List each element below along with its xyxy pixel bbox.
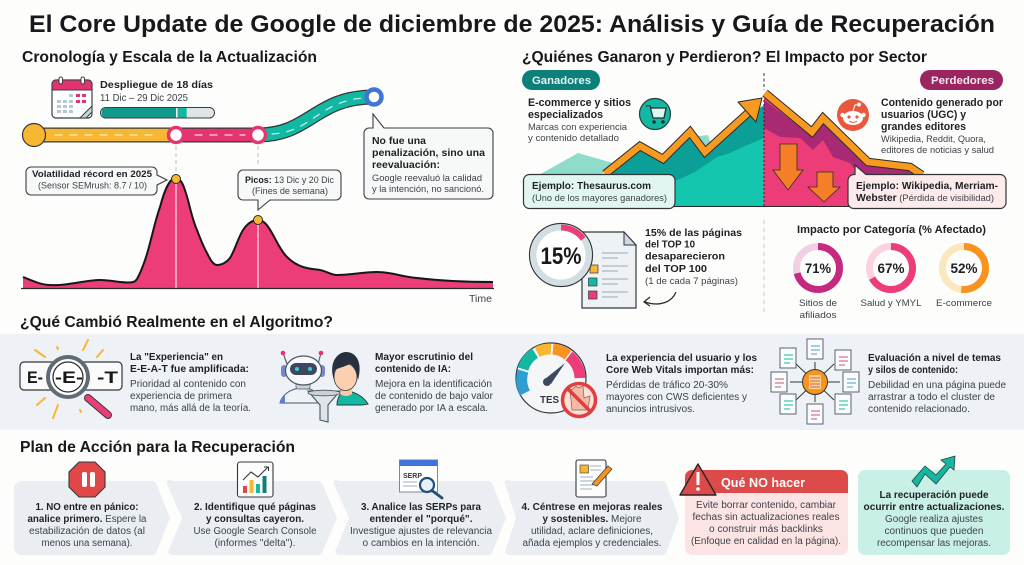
stat ring: 15%	[530, 224, 592, 286]
step 1 chevron	[14, 481, 170, 555]
donut: 67%	[870, 246, 912, 290]
icon: down arrow small	[808, 172, 840, 202]
text: core web vitals: Pérdidas de tráfico 20-30%	[606, 380, 728, 391]
box: qué no hacer: Qué NO hacer	[721, 475, 805, 490]
step 3 chevron: 3. Analice las SERPs para	[361, 502, 481, 513]
box: qué no hacer	[680, 464, 848, 555]
step 3 chevron	[334, 480, 506, 555]
callout: ejemplo perdedor: Webster (Pérdida de visibilidad)	[856, 192, 994, 204]
icon: gauge with prohibition	[516, 343, 596, 416]
step 2 chevron: Use Google Search Console	[194, 526, 317, 537]
text: evaluación temas: Evaluación a nivel de temas	[868, 353, 1001, 364]
title: El Core Update de Google de diciembre de 2025: Análisis y Guía de Recuperación	[29, 11, 995, 38]
text: evaluación temas	[868, 353, 1006, 415]
step 4 chevron: añada ejemplos y credenciales.	[522, 538, 662, 549]
step 4 chevron: utilidad, aclare definiciones,	[531, 526, 653, 537]
heading: impacto por sector: ¿Quiénes Ganaron y Perdieron? El Impacto por Sector	[522, 49, 927, 66]
icon: upward arrow	[912, 456, 955, 487]
text: experiencia: E-E-A-T fue amplificada:	[130, 364, 249, 375]
callout: picos	[238, 170, 341, 210]
donut: 71%	[796, 246, 840, 290]
step 2 chevron: y consultas cayeron.	[206, 514, 304, 525]
box: qué no hacer: fechas sin actualizaciones reales	[692, 512, 840, 523]
text: despliegue	[100, 79, 213, 104]
icon: robot, person and funnel	[280, 351, 368, 422]
pill: perdedores: Perdedores	[931, 75, 994, 87]
text: 15% de páginas: del TOP 100	[645, 263, 707, 275]
stat ring: 15%: 15%	[540, 243, 582, 270]
text: contenido de IA	[375, 352, 494, 414]
icon: gauge with prohibition: TES	[540, 395, 559, 406]
icon: SERP magnifier	[400, 460, 442, 498]
step 1 chevron: 1. NO entre en pánico:	[36, 502, 138, 513]
icon: SERP magnifier: SERP	[403, 471, 422, 480]
text: contenido de IA: Mayor escrutinio del	[375, 352, 473, 363]
text: ganadores: E-commerce y sitios	[528, 97, 631, 109]
text: 15% de páginas: del TOP 10	[645, 238, 695, 250]
text: evaluación temas: Debilidad en una página puede	[868, 380, 1006, 391]
text: ganadores: Marcas con experiencia	[528, 122, 628, 133]
text: perdedores: Contenido generado por	[881, 97, 1004, 109]
callout: no fue una penalización	[364, 114, 493, 199]
callout: ejemplo ganador: (Uno de los mayores ganadores)	[532, 193, 667, 204]
timeline start node	[22, 124, 46, 146]
text: experiencia: mano, más allá de la teoría.	[130, 403, 251, 414]
callout: no fue una penalización: penalización, sino una	[372, 147, 485, 159]
timeline node: 13 Dic	[168, 128, 184, 142]
icon: E-E-A-T magnifier: -E-	[55, 368, 83, 387]
icon: shopping cart	[640, 98, 670, 130]
text: contenido de IA: generado por IA a escala.	[375, 403, 488, 414]
text: despliegue: 11 Dic – 29 Dic 2025	[100, 92, 188, 104]
text: despliegue: Despliegue de 18 días	[100, 79, 213, 91]
icon: document	[582, 232, 636, 308]
box: recuperación: continuos que pueden	[884, 526, 984, 537]
box: recuperación: La recuperación puede	[880, 490, 989, 501]
timeline node: 20 Dic	[250, 128, 266, 142]
text: experiencia: Prioridad al contenido con	[130, 379, 246, 390]
band background	[0, 334, 1024, 430]
text: contenido de IA: de contenido de bajo valor	[375, 391, 494, 402]
box: qué no hacer: Evite borrar contenido, cambiar	[696, 500, 837, 511]
text: perdedores	[881, 97, 1004, 156]
text: core web vitals: Core Web Vitals importan más:	[606, 365, 754, 376]
box: recuperación: ocurrir entre actualizaciones.	[864, 502, 1005, 513]
panel: plan de acción	[14, 439, 1010, 555]
step 1 chevron: menos una semana).	[42, 538, 132, 549]
icon: stop pause	[69, 462, 105, 497]
text: evaluación temas: arrastrar a todo el cluster de	[868, 392, 995, 403]
heading: qué cambió: ¿Qué Cambió Realmente en el Algoritmo?	[20, 314, 333, 331]
divider: categorías	[763, 220, 765, 315]
text: core web vitals: mayores con CWS deficientes y	[606, 392, 747, 403]
text: core web vitals: anuncios intrusivos.	[606, 404, 695, 415]
icon: bar chart	[238, 462, 273, 497]
icon: notepad with pencil	[576, 460, 612, 497]
callout: no fue una penalización: y la intención, no sancionó.	[372, 184, 484, 194]
axis label: time: Time	[469, 293, 492, 305]
text: 15% de páginas: desaparecieron	[645, 250, 725, 262]
step 1 chevron: analice primero. Espere la	[28, 514, 147, 525]
box: recuperación: Google realiza ajustes	[885, 514, 983, 525]
callout: picos: Picos: 13 Dic y 20 Dic	[245, 175, 334, 186]
text: experiencia: experiencia de primera	[130, 391, 232, 402]
callout: volatilidad: Volatilidad récord en 2025	[32, 169, 153, 180]
donut: 52%	[942, 246, 986, 290]
pill: perdedores	[920, 70, 1003, 90]
label: sitios de afiliados	[799, 298, 837, 321]
icon: calendar	[52, 77, 92, 118]
donut: 52%: 52%	[950, 261, 978, 276]
callout: ejemplo perdedor	[848, 165, 1006, 208]
callout: volatilidad	[26, 167, 167, 195]
pill: ganadores	[522, 70, 600, 90]
step 3 chevron: Investigue ajustes de relevancia	[350, 526, 492, 537]
icon: reddit	[837, 99, 869, 131]
icon: E-E-A-T magnifier	[20, 340, 122, 418]
icon: down arrow large	[773, 144, 803, 190]
winners chart	[537, 98, 764, 206]
box: qué no hacer: (Enfoque en calidad en la página).	[691, 536, 841, 547]
text: ganadores: y contenido detallado	[528, 133, 619, 144]
text: perdedores: usuarios (UGC) y	[881, 109, 967, 121]
label: e-commerce: E-commerce	[936, 298, 992, 309]
callout: no fue una penalización: No fue una	[372, 135, 426, 147]
label: salud y ymyl: Salud y YMYL	[860, 298, 922, 309]
callout: no fue una penalización: reevaluación:	[372, 159, 440, 171]
callout: picos: (Fines de semana)	[252, 186, 328, 197]
donut: 67%: 67%	[878, 261, 904, 276]
progress bar	[100, 108, 214, 118]
text: experiencia: La "Experiencia" en	[130, 352, 223, 363]
panel: 15% de las páginas	[530, 224, 742, 308]
heading: cronología: Cronología y Escala de la Actualización	[22, 49, 317, 66]
callout: volatilidad: (Sensor SEMrush: 8.7 / 10)	[38, 180, 147, 192]
icon: topic cluster	[771, 339, 859, 424]
step 3 chevron: entender el "porqué".	[370, 514, 473, 525]
icon: E-E-A-T magnifier: E-	[27, 368, 43, 387]
heading: plan de acción: Plan de Acción para la Recuperación	[20, 439, 295, 456]
step 4 chevron	[505, 480, 679, 555]
step 4 chevron: y sostenibles. Mejore	[542, 514, 642, 525]
callout: ejemplo ganador: Ejemplo: Thesaurus.com	[532, 180, 651, 192]
losers chart	[600, 93, 935, 206]
text: perdedores: Wikipedia, Reddit, Quora,	[881, 134, 986, 145]
step 4 chevron: 4. Céntrese en mejoras reales	[522, 502, 663, 513]
text: core web vitals	[606, 353, 757, 415]
step 2 chevron: (informes "delta").	[214, 538, 296, 549]
box: recuperación	[858, 470, 1010, 555]
timeline road	[34, 97, 374, 135]
text: perdedores: editores de noticias y salud	[881, 145, 994, 156]
box: qué no hacer: o construir más backlinks	[709, 524, 823, 535]
pill: ganadores: Ganadores	[532, 75, 591, 87]
step 3 chevron: o cambios en la intención.	[362, 538, 480, 549]
text: experiencia	[130, 352, 251, 414]
text: perdedores: grandes editores	[881, 121, 966, 133]
callout: ejemplo ganador	[524, 174, 675, 208]
icon: E-E-A-T magnifier: -T	[97, 368, 119, 387]
panel: impacto por categoría	[796, 224, 992, 321]
text: contenido de IA: Mejora en la identificación	[375, 379, 492, 390]
callout: ejemplo perdedor: Ejemplo: Wikipedia, Merriam-	[856, 180, 998, 192]
text: ganadores: especializados	[528, 109, 603, 121]
label: sitios de afiliados: afiliados	[800, 310, 837, 321]
box: recuperación: recompensar las mejoras.	[877, 538, 991, 549]
step 1 chevron: estabilización de datos (al	[29, 526, 145, 537]
label: sitios de afiliados: Sitios de	[799, 298, 837, 309]
callout: no fue una penalización: Google reevaluó la calidad	[372, 173, 482, 183]
step 2 chevron: 2. Identifique qué páginas	[194, 502, 316, 513]
panel: qué cambió	[0, 314, 1024, 430]
heading: impacto por categoría: Impacto por Categoría (% Afectado)	[797, 224, 986, 236]
text: 15% de páginas: (1 de cada 7 páginas)	[645, 276, 738, 287]
text: core web vitals: La experiencia del usuario y los	[606, 353, 757, 364]
text: ganadores	[528, 97, 631, 144]
step 2 chevron	[167, 480, 337, 555]
arrow: curved to document	[644, 292, 676, 306]
timeline end node	[366, 90, 382, 104]
volatility area chart	[21, 146, 494, 288]
divider	[763, 73, 765, 90]
donut: 71%: 71%	[805, 261, 831, 276]
text: evaluación temas: contenido relacionado.	[868, 404, 970, 415]
panel: cronología y escala	[21, 49, 494, 305]
text: 15% de páginas	[645, 227, 742, 287]
text: evaluación temas: y silos de contenido:	[868, 365, 958, 376]
panel: ganadores y perdedores	[522, 49, 1006, 208]
text: contenido de IA: contenido de IA:	[375, 364, 451, 375]
text: 15% de páginas: 15% de las páginas	[645, 227, 742, 239]
